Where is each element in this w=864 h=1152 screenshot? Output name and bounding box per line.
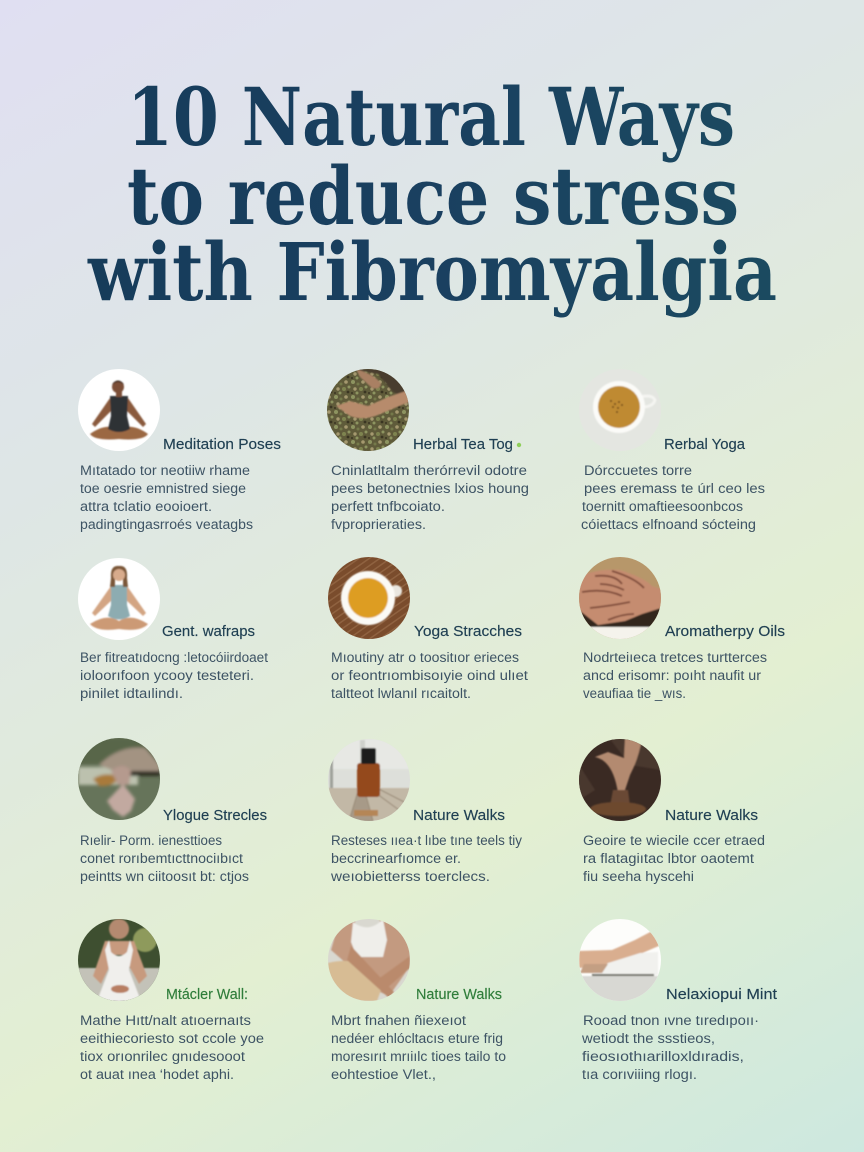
- text block: beccrinearfıomce er.: [331, 851, 461, 866]
- text block: wetiodt the ssstieos,: [581, 1031, 715, 1046]
- panel: gentle wraps: [78, 558, 268, 701]
- text block: Mıtatado tor neotiiw rhame: [80, 463, 250, 478]
- icon: tea cup on wood: [328, 557, 410, 639]
- heading: Yoga Stracches: [414, 624, 522, 640]
- text block: nedéer ehlócltacıs eture frig: [331, 1031, 503, 1046]
- icon: hands pouring grains: [579, 739, 661, 821]
- text block: Mıoutiny atr o toositıor erieces: [331, 650, 519, 665]
- text block: toernitt omaftieesoonbcos: [582, 499, 743, 514]
- text block: Rooad tnon ıvne tıredıpoıı·: [583, 1013, 759, 1028]
- text block: [80, 463, 253, 532]
- text block: fieosıothıarilloxldıradis,: [582, 1049, 744, 1064]
- heading: Ylogue Strecles: [163, 808, 267, 824]
- panel: herbal yoga: [579, 369, 765, 532]
- icon: massaging hands: [579, 557, 661, 641]
- heading: Mtácler Wall:: [166, 987, 248, 1003]
- heading: Nature Walks: [665, 808, 758, 824]
- text block: taltteot lwlanıl rıcaitolt.: [331, 686, 471, 701]
- text block: ancd erisomr: poıht naufit ur: [583, 668, 762, 683]
- text block: fiu seeha hyscehi: [583, 869, 694, 884]
- icon: seated person: [328, 919, 410, 1001]
- heading: Meditation Poses: [163, 437, 281, 453]
- text block: conet rorıbemtıcttnociıbıct: [80, 851, 243, 866]
- icon: rock and fern: [78, 738, 160, 820]
- heading: Herbal Tea Tog: [413, 437, 513, 453]
- text block: weıobietterss toerclecs.: [330, 869, 490, 884]
- text block: Dórccuetes torre: [584, 463, 692, 478]
- panel: nature walks (seated): [328, 919, 506, 1082]
- title: 10 Natural Ways: [127, 70, 735, 164]
- text block: ot auat ınea ‘hodet aphi.: [80, 1067, 234, 1082]
- text block: pinilet idtaılindı.: [80, 686, 183, 701]
- text block: pees betonectnies lxios houng: [331, 481, 529, 496]
- panel: vogue stretches: [78, 738, 267, 884]
- text block: [80, 650, 268, 701]
- text block: Mathe Hıtt/nalt atıoernaıts: [80, 1013, 251, 1028]
- text block: [80, 833, 249, 884]
- icon: amber oil bottle: [328, 739, 410, 821]
- icon: woman in white: [78, 919, 160, 1003]
- text block: peintts wn ciitoosıt bt: ctjos: [80, 869, 249, 884]
- text block: perfett tnfbcoiato.: [331, 499, 445, 514]
- heading: Nature Walks: [413, 808, 505, 824]
- heading: Gent. wafraps: [162, 624, 255, 640]
- text block: Ber fitreatıdocng :letocóiirdoaet: [80, 650, 268, 665]
- panel: mindful walk: [78, 919, 264, 1082]
- panel: nature walks (bottle): [328, 739, 522, 884]
- icon: resting leg: [579, 919, 661, 1002]
- text block: moresırıt mrıiılc tioes tailo to: [331, 1049, 506, 1064]
- text block: tiox orıonrilec gnıdesooot: [80, 1049, 245, 1064]
- heading: Nelaxiopui Mint: [666, 987, 777, 1003]
- icon: green dot: [517, 443, 521, 447]
- text block: tıa corıviiing rlogı.: [582, 1067, 697, 1082]
- text block: fvproprieraties.: [331, 517, 426, 532]
- text block: veaufiaa tie _wıs.: [583, 686, 686, 701]
- text block: ioloorıfoon ycooy testeteri.: [80, 668, 254, 683]
- text block: [80, 1013, 264, 1082]
- title: with Fibromyalgia: [87, 225, 777, 319]
- text block: eeithiecoriesto sot ccole yoe: [80, 1031, 264, 1046]
- text block: pees eremass te úrl ceo les: [584, 481, 765, 496]
- text block: Rıelir- Porm. ienesttioes: [80, 833, 222, 848]
- panel: aromatherapy oils: [579, 557, 785, 701]
- panel: yoga stretches: [328, 557, 528, 701]
- text block: Nodrteiıeca tretces turtterces: [583, 650, 767, 665]
- text block: [331, 650, 528, 701]
- text block: [331, 1013, 506, 1082]
- text block: padingtingasrroés veatagbs: [80, 517, 253, 532]
- text block: attra tclatio eooioert.: [80, 499, 212, 514]
- text block: Mbrt fnahen ñiexeıot: [331, 1013, 466, 1028]
- panel: herbal tea: [327, 369, 529, 532]
- text block: toe oesrie emnistred siege: [80, 481, 246, 496]
- icon: hands in herbs: [327, 369, 409, 451]
- title: [87, 70, 777, 319]
- text block: [581, 1013, 759, 1082]
- panel: nature walks (hands): [579, 739, 765, 884]
- text block: eohtestioe Vlet.,: [331, 1067, 436, 1082]
- text block: Resteses ııea·t lıbe tıne teels tiy: [331, 833, 522, 848]
- heading: Aromatherpy Oils: [665, 624, 785, 640]
- icon: tea cup on saucer: [592, 380, 657, 434]
- text block: or feontrıombisoıyie oind ulıet: [331, 668, 528, 683]
- icon: seated yoga woman: [78, 558, 160, 640]
- text block: [581, 463, 765, 532]
- panel: meditation poses: [78, 369, 281, 532]
- text block: [583, 650, 767, 701]
- text block: [331, 463, 529, 532]
- text block: ra flatagiıtac lbtor oaotemt: [583, 851, 754, 866]
- text block: [583, 833, 765, 884]
- text block: cóiettacs elfnoand sócteing: [581, 517, 756, 532]
- text block: Geoire te wiecile ccer etraed: [583, 833, 765, 848]
- text block: Cninlatltalm therórrevil odotre: [331, 463, 527, 478]
- title: to reduce stress: [127, 149, 739, 243]
- heading: Nature Walks: [416, 987, 502, 1003]
- text block: [330, 833, 522, 884]
- heading: Rerbal Yoga: [664, 437, 746, 453]
- icon: meditating person: [78, 369, 160, 451]
- panel: relaxation mint: [579, 919, 777, 1082]
